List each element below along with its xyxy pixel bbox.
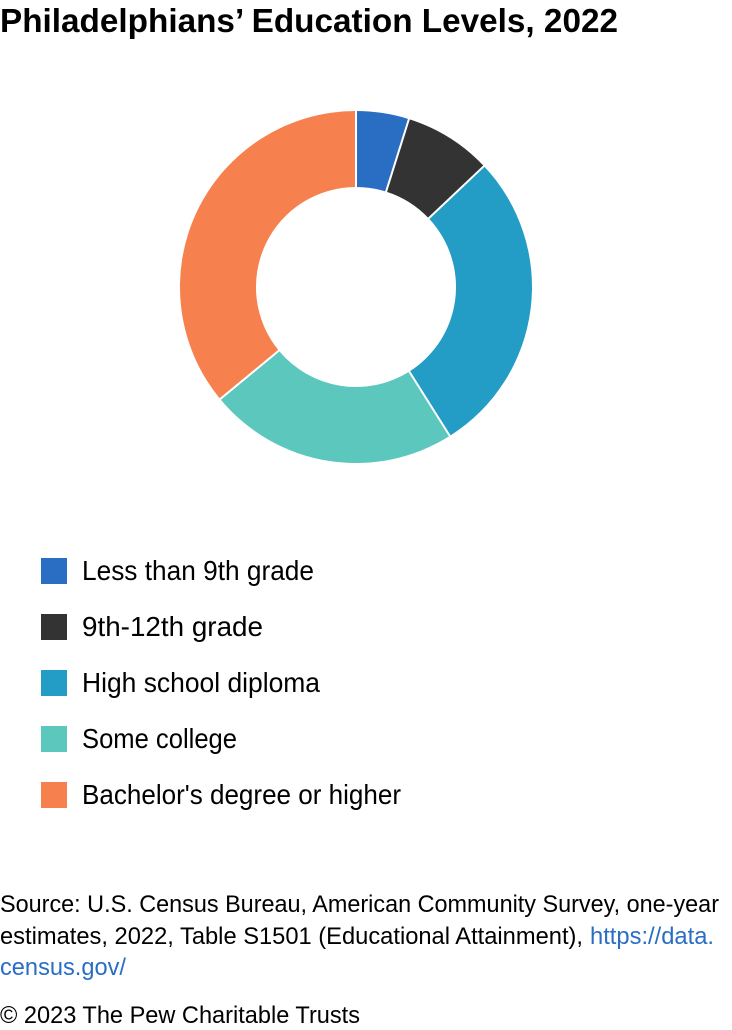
segment: some college xyxy=(220,351,450,463)
source note: https://data. xyxy=(590,923,714,950)
copyright: © 2023 The Pew Charitable Trusts xyxy=(0,1002,360,1029)
title: Philadelphians’ Education Levels, 2022 xyxy=(0,2,618,39)
legend item: high school diploma: High school diploma xyxy=(82,667,321,698)
segment: bachelor's degree or higher xyxy=(180,111,356,399)
segment: 9th-12th grade xyxy=(386,119,484,218)
legend xyxy=(41,555,401,810)
source note: estimates, 2022, Table S1501 (Educational Attainment), xyxy=(0,923,583,950)
legend item: bachelor's degree or higher: Bachelor's degree or higher xyxy=(82,779,401,810)
legend item: some college: Some college xyxy=(82,723,237,754)
source note xyxy=(0,891,719,981)
segment: less than 9th grade xyxy=(356,111,409,192)
segment: high school diploma xyxy=(409,166,532,436)
donut chart xyxy=(180,109,532,463)
legend item: 9th-12th grade: 9th-12th grade xyxy=(82,611,263,642)
source note: Source: U.S. Census Bureau, American Community Survey, one-year xyxy=(0,891,719,918)
legend item: less than 9th grade: Less than 9th grade xyxy=(82,555,314,586)
source note: census.gov/ xyxy=(0,954,126,981)
